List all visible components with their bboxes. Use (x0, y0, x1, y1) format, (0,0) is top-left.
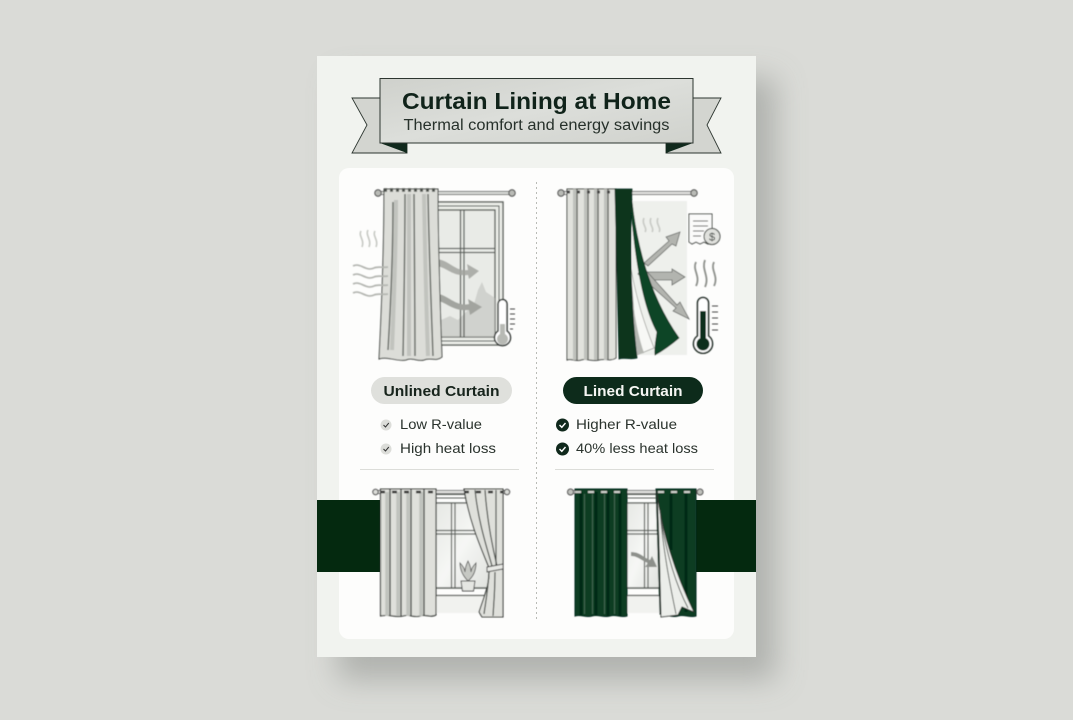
left curtain grommets (575, 491, 627, 493)
label pill: unlined curtain (371, 377, 512, 404)
label pill: unlined curtain: Unlined Curtain (384, 383, 500, 400)
banner body (380, 78, 693, 143)
poster card (317, 56, 756, 657)
curtain rod (558, 190, 697, 196)
area under sill (436, 596, 490, 613)
dark green lining strip (631, 190, 679, 355)
curtain panel light (567, 189, 616, 361)
left curtain grommets (380, 491, 436, 493)
curtain heading (384, 188, 438, 192)
green band left (317, 500, 380, 572)
right curtain grommets (464, 491, 503, 493)
illustration: lined curtain (558, 189, 720, 361)
title: Curtain Lining at Home (402, 88, 671, 114)
card shadow (338, 78, 776, 680)
tieback (487, 564, 503, 572)
right ribbon fold (666, 143, 693, 153)
right curtain tied back (464, 489, 503, 617)
reflection arrows (638, 232, 689, 319)
check icon (380, 444, 392, 454)
left curtain fold shadows (387, 492, 421, 616)
curtain fold shadows (392, 194, 428, 356)
window mullions (430, 210, 495, 337)
window (436, 494, 490, 596)
item high heat loss: High heat loss (400, 440, 496, 456)
right curtain folds (475, 490, 497, 616)
title banner (352, 78, 721, 153)
window frame (430, 202, 503, 345)
subtitle: Thermal comfort and energy savings (404, 117, 670, 134)
green band right (696, 500, 756, 572)
centre dotted divider (536, 182, 538, 622)
right curtain grommets (658, 491, 696, 493)
left curtain folds (390, 489, 424, 616)
curtain fabric (379, 189, 442, 360)
dark green curtain face (615, 189, 637, 359)
left ribbon tail (352, 98, 407, 153)
left curtain (380, 489, 436, 617)
pale backdrop (632, 201, 687, 355)
illustration: unlined curtain (353, 189, 515, 360)
bill icon (689, 214, 720, 244)
illustration: lined window scene (568, 489, 703, 617)
heat flow arrows (434, 259, 482, 315)
left green curtain (575, 489, 627, 617)
curtain rod (375, 190, 515, 196)
label pill: lined curtain: Lined Curtain (584, 383, 682, 400)
check icon (380, 420, 392, 430)
grey lining fold (630, 272, 644, 355)
window (627, 494, 661, 596)
thermometer (694, 298, 718, 353)
heat waves (695, 260, 716, 287)
heat waves (360, 230, 377, 247)
light curtain fold shadows (574, 189, 606, 360)
left curtain dark folds (581, 492, 620, 616)
right curtain folds (671, 494, 686, 612)
lining folds (660, 510, 688, 614)
check icon (556, 418, 569, 432)
curtain folds (388, 194, 433, 356)
item higher r-value: Higher R-value (576, 416, 677, 432)
light curtain folds (577, 189, 608, 360)
list: unlined curtain (380, 416, 496, 456)
item low r-value: Low R-value (400, 416, 482, 432)
list: lined curtain (556, 416, 698, 456)
heat arrow (631, 552, 657, 567)
curtain rod (373, 489, 510, 495)
illustration: unlined window scene (373, 489, 510, 617)
cold air waves (353, 265, 388, 296)
label pill: lined curtain (563, 377, 703, 404)
left ribbon fold (380, 143, 407, 153)
plant in pot (460, 561, 476, 591)
check icon (556, 442, 569, 456)
left curtain highlights (584, 494, 614, 614)
bill icon: $ (709, 232, 715, 244)
right ribbon tail (666, 98, 721, 153)
curtain rod (568, 489, 703, 495)
area under sill (627, 596, 661, 613)
heat wave behind curtain (643, 218, 660, 232)
right green curtain (656, 489, 696, 617)
rings (567, 190, 616, 194)
content panel (339, 168, 734, 639)
thermometer (494, 300, 515, 346)
folded white lining (657, 491, 694, 617)
white lining (630, 262, 654, 355)
section rules (360, 468, 714, 470)
item 40% less heat loss: 40% less heat loss (576, 440, 698, 456)
house silhouette through window (440, 282, 495, 337)
